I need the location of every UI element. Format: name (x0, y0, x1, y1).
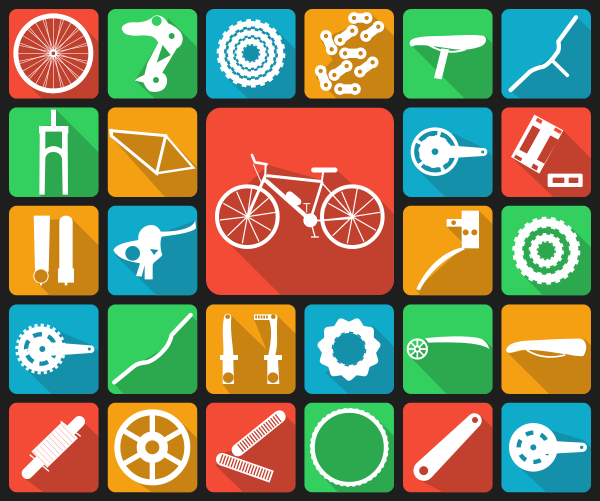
tile: shock (9, 403, 99, 492)
icon: cog (321, 322, 377, 377)
tile: brake lever (108, 206, 197, 295)
icon: derailleur (122, 15, 183, 92)
tile: cog (304, 304, 394, 394)
tile: main bicycle (206, 108, 394, 295)
tile: chain (304, 9, 394, 99)
tile: handlebar blue (501, 9, 591, 99)
icon: bicycle (217, 155, 383, 247)
icon: cassette (218, 20, 284, 86)
tile: cassette green (501, 206, 591, 295)
icon: chain links (321, 18, 378, 89)
icon: v-brake arms (220, 314, 282, 384)
tile: bicycle wheel (9, 9, 99, 99)
icon: handlebar (511, 17, 576, 90)
tile: ring (304, 403, 394, 492)
icon: fork legs (33, 216, 74, 285)
icon: crankset disc (509, 423, 587, 472)
tile: grips (206, 403, 296, 492)
icon: crankset toothed (17, 325, 94, 373)
icon: suspension fork (39, 110, 68, 195)
tile: saddle side (501, 304, 591, 394)
tile: rear derailleur (108, 9, 197, 99)
tile: crankset with chainring (403, 107, 493, 197)
icon: chain tensioner (408, 336, 489, 359)
icon: handlebar grips (221, 417, 279, 477)
icon: crank arm (413, 413, 482, 481)
icon: sprocket cassette (514, 218, 579, 283)
tile: tensioner (403, 304, 493, 394)
icon: brake arm (416, 211, 479, 291)
tile: crankset with teeth (9, 304, 99, 394)
tile: crankset disc (501, 403, 591, 492)
icon: crankset (411, 127, 487, 176)
tile: v-brakes (206, 304, 296, 394)
tile: bike frame (108, 107, 197, 197)
tile: pedals (501, 107, 591, 197)
tile: cassette blue (206, 9, 296, 99)
tile: crank arm (403, 403, 493, 492)
tile: fork (9, 107, 99, 197)
icon: pedals (511, 115, 583, 187)
tile: handlebar green (108, 304, 197, 394)
icon: handlebar (114, 315, 191, 382)
icon: saddle (506, 339, 586, 357)
tile: fork legs (9, 206, 99, 295)
tile: rotor wheel (108, 403, 197, 492)
icon: six-spoke wheel (117, 412, 187, 482)
icon: frame (111, 129, 193, 173)
icon: shock absorber (27, 421, 81, 473)
icon: toothed ring (311, 409, 388, 486)
tile: brake arch (403, 206, 493, 295)
icon: saddle (410, 35, 486, 79)
icon: brake lever (113, 221, 196, 279)
icon: wheel (16, 16, 91, 91)
tile: saddle with post (403, 9, 493, 99)
